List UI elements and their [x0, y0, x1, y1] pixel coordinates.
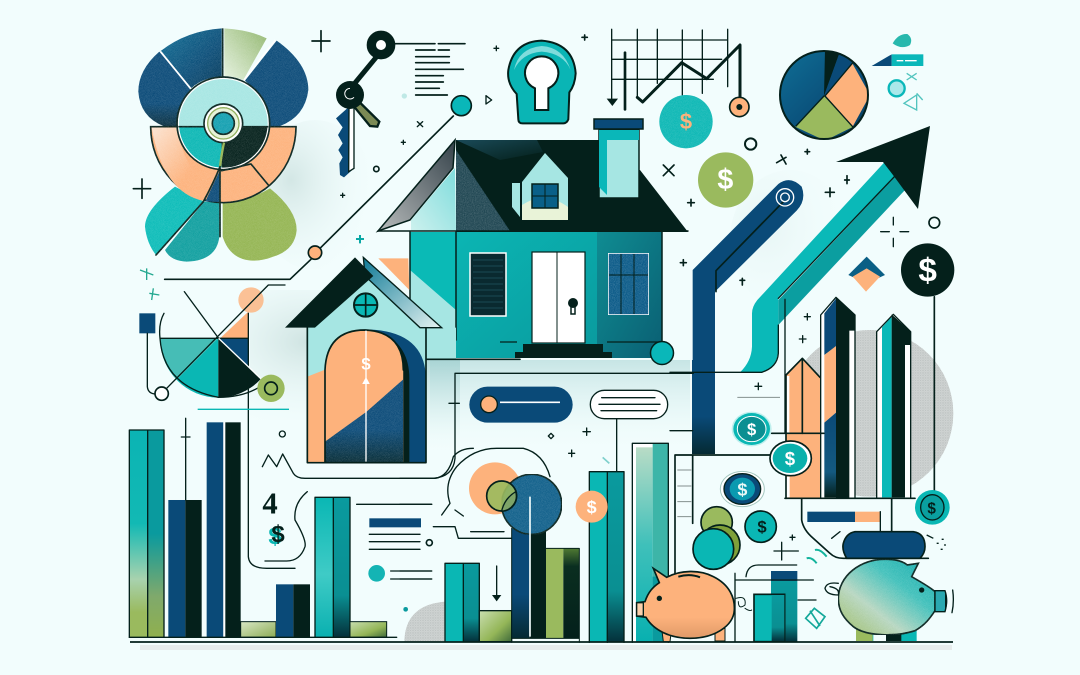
small bar chart [735, 565, 816, 642]
connector line [165, 116, 453, 279]
list lines [393, 44, 465, 95]
coin 4 [745, 511, 776, 542]
green coin: $ [717, 164, 733, 196]
tall tower [821, 297, 855, 498]
tall pale bar [632, 443, 668, 642]
right piggy bank [825, 559, 953, 641]
central target [204, 104, 243, 143]
small green bar [241, 622, 276, 637]
down arrow [492, 566, 501, 601]
round window [354, 293, 377, 317]
baseline [130, 641, 953, 643]
petal: top left blue [161, 28, 222, 88]
arrowhead [836, 126, 930, 209]
teal coin: $ [680, 109, 692, 134]
navy arch band [365, 329, 426, 463]
cable and square [139, 313, 168, 400]
right window [608, 253, 649, 315]
list block [357, 504, 432, 549]
petal: left navy [138, 52, 191, 126]
navy pill [469, 387, 573, 423]
orange left wall [307, 368, 328, 463]
roof left [285, 257, 373, 328]
venn circles [469, 462, 579, 642]
orange node [308, 246, 322, 259]
icon: key blade [336, 107, 354, 177]
left piggy bank [637, 568, 734, 642]
orange coin [576, 491, 608, 523]
icon: second key blade [355, 100, 379, 127]
small green bar 2 [350, 622, 387, 637]
main house [378, 119, 688, 364]
roof right [363, 257, 442, 328]
left window [470, 253, 506, 316]
bar 5 [315, 497, 350, 637]
flower pie chart [138, 28, 308, 262]
dollar sign: $ [271, 521, 285, 548]
towers and coins [675, 297, 953, 642]
key, list and connector line [133, 31, 499, 300]
peach highlight [152, 128, 214, 201]
navy wedge [205, 170, 220, 202]
stacked coins [693, 507, 740, 569]
teal bullet [368, 565, 432, 582]
line chart [607, 29, 740, 109]
steps [500, 342, 662, 358]
navy arrow band [692, 180, 803, 454]
orange coin: $ [587, 497, 597, 517]
line chart and dollar coins [582, 29, 849, 285]
box with ticks [675, 397, 780, 577]
wall [307, 273, 456, 463]
coin 2 [770, 441, 811, 476]
teal diamond icon [806, 608, 825, 628]
small marks [582, 35, 849, 285]
grey dotted circle [806, 330, 954, 497]
bar 3 [207, 422, 241, 637]
orange dot node [730, 97, 749, 117]
outlined pill [590, 390, 668, 472]
round knob [650, 342, 674, 364]
number four: 4 [262, 486, 278, 520]
diamond icon and marks [848, 217, 940, 292]
coin 3: $ [737, 479, 747, 499]
navy pill [843, 532, 925, 558]
house body [410, 232, 662, 358]
teal bar [445, 563, 479, 642]
coin 5: $ [927, 500, 936, 517]
lower left teal petal [145, 187, 204, 255]
grey half circle [404, 602, 445, 642]
bar 4 [276, 584, 310, 637]
teal arrow band [670, 162, 905, 433]
lower right green petal [223, 188, 297, 261]
coin 2: $ [785, 448, 796, 469]
bar 1 [129, 430, 164, 637]
lower middle teal petal [165, 202, 219, 262]
bar chart left [129, 418, 397, 637]
dormer [512, 153, 568, 220]
lower bar with navy and orange [807, 512, 880, 532]
coin 1: $ [747, 420, 757, 439]
top right small icons [872, 34, 923, 110]
green coin [698, 152, 753, 208]
swirl [736, 597, 752, 611]
small marks [140, 46, 499, 300]
black dollar coin: $ [918, 253, 937, 290]
central ring [177, 77, 270, 170]
coin 1 [732, 412, 772, 446]
teal coin [659, 95, 713, 148]
bowl pie chart [139, 285, 295, 568]
small house [285, 257, 520, 463]
chimney [594, 119, 643, 198]
tower base and leader lines [772, 297, 934, 558]
arch door: $ [361, 354, 371, 373]
green bar [479, 611, 512, 642]
teal bar [589, 472, 624, 642]
small marks [755, 314, 946, 563]
orange rear gable [378, 258, 409, 290]
coin 4: $ [757, 518, 767, 537]
coin 3 [720, 471, 764, 507]
squiggles [262, 431, 473, 612]
peach half ring [151, 127, 296, 203]
plus signs [133, 31, 330, 198]
door [532, 252, 585, 343]
icon: key ring [371, 35, 391, 55]
pie chart [779, 50, 870, 141]
icon: keyhole lock [508, 41, 576, 123]
lower middle bars and annotations [262, 431, 512, 642]
coin 5 [915, 490, 950, 525]
teal node [451, 96, 471, 116]
green ring [257, 375, 285, 402]
connector lines [400, 373, 693, 579]
shaded haze around flower and houses [140, 120, 952, 650]
centre panel [400, 373, 693, 642]
small marks [548, 428, 693, 463]
petal: right navy [245, 41, 308, 126]
black dollar coin [901, 243, 954, 297]
petal: top right sage [224, 28, 267, 80]
dollar sign: $ [268, 523, 282, 550]
orange tower [786, 358, 820, 498]
third tower [877, 314, 911, 497]
bar 2 [168, 418, 202, 637]
icon: key head [336, 57, 377, 109]
arch door [323, 329, 405, 463]
roof [378, 140, 688, 232]
